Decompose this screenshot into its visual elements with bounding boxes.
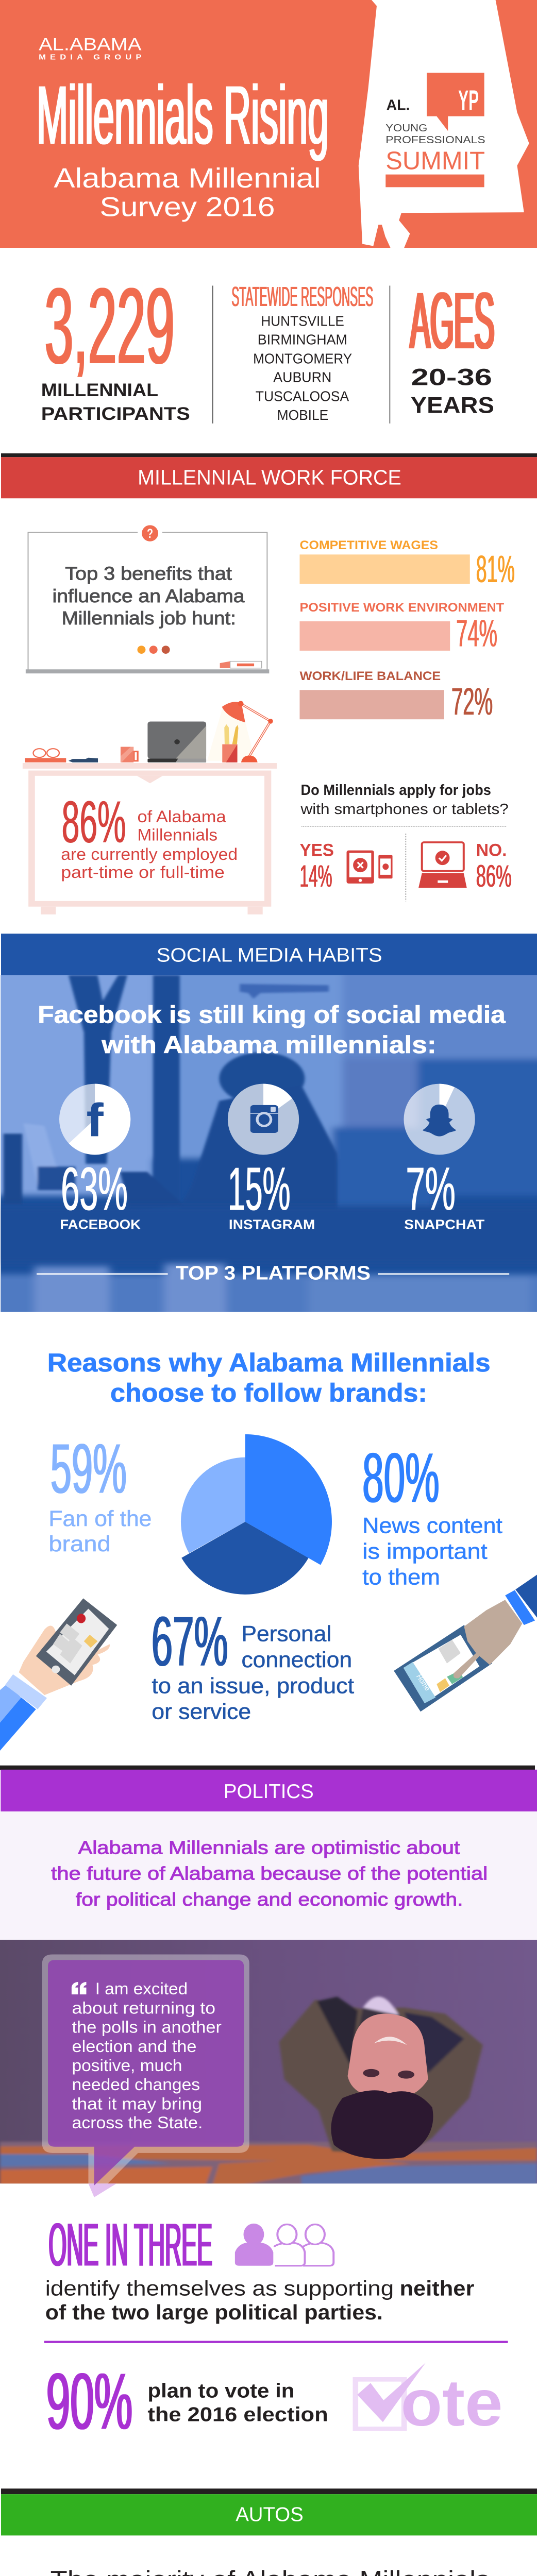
poll: applying with mobile devices: with smartphones or tablets? <box>300 801 509 817</box>
section header <box>1 1770 537 1811</box>
whiteboard <box>26 525 269 673</box>
stat: 3,229 participants: MILLENNIAL <box>41 380 158 400</box>
pie chart <box>181 1434 332 1595</box>
section header <box>1 457 537 498</box>
platform: Snapchat: SNAPCHAT <box>404 1217 484 1232</box>
stat: 59 percent: Fan of the <box>48 1506 152 1531</box>
platform: Instagram <box>228 1084 315 1232</box>
platform: Snapchat: 7% <box>406 1155 456 1223</box>
illustration: left hand holding phone <box>0 1598 117 1751</box>
panel: politics <box>0 1770 537 2197</box>
icon: Facebook pie: f <box>86 1095 104 1146</box>
stat: one in three: neither <box>400 2276 474 2300</box>
icon: laptop <box>147 721 206 762</box>
stat: 86 percent employed: Millennials <box>137 826 217 844</box>
icon: quotation mark <box>72 1982 86 1994</box>
stat: 80 percent <box>362 1438 502 1589</box>
intro statement: for political change and economic growth. <box>76 1889 463 1910</box>
stat: 90 percent: 90% <box>46 2357 132 2446</box>
statewide responses list: MONTGOMERY <box>253 351 352 367</box>
intro statement: Alabama Millennials are optimistic about <box>78 1837 460 1858</box>
heading: with Alabama millennials: <box>101 1031 437 1058</box>
stat: 80 percent: to them <box>362 1565 440 1589</box>
panel: millennial work force <box>1 453 537 914</box>
quote text: I am excited <box>95 1979 188 1998</box>
subtitle <box>54 163 321 223</box>
callout: quote bubble <box>42 1955 249 2197</box>
poll: applying with mobile devices: 14% <box>299 859 332 893</box>
logo: Young Professionals Summit: AL. <box>387 97 410 113</box>
stat: 86 percent employed: 86% <box>62 789 126 855</box>
panel: reasons to follow brands <box>0 1348 537 1770</box>
stat: 59 percent: brand <box>48 1531 111 1556</box>
desk illustration <box>23 701 277 914</box>
poll: applying with mobile devices: Do Millennials apply for jobs <box>300 782 491 798</box>
stat: one in three: of the two large political parties. <box>45 2300 383 2324</box>
stat: 80 percent: News content <box>362 1513 502 1538</box>
stat: 90 percent: plan to vote in <box>147 2380 295 2402</box>
icon: Snapchat pie <box>404 1084 475 1155</box>
statewide responses list: TUSCALOOSA <box>256 388 349 404</box>
panel: header and overview: 3,229 <box>44 266 175 386</box>
heading <box>47 1348 491 1408</box>
photo: woman lying on painted ground <box>0 1940 537 2185</box>
photo background: person at desk in blue tint <box>0 970 537 1321</box>
platform: Instagram: 15% <box>228 1155 291 1223</box>
logo: Young Professionals Summit: PROFESSIONALS <box>385 133 485 145</box>
icon: mug <box>121 747 138 762</box>
stat: no <box>476 840 512 893</box>
stat: ages: 20-36 <box>411 365 492 390</box>
stat: 59 percent <box>48 1430 152 1556</box>
board text: influence an Alabama <box>53 586 245 607</box>
logo: Young Professionals Summit: YOUNG <box>385 122 427 133</box>
hero banner background <box>0 0 537 248</box>
icon: question mark <box>142 525 158 541</box>
icon: vote checkbox: ote <box>401 2366 503 2439</box>
stat: 86 percent employed: of Alabama <box>137 808 226 826</box>
section header: autos <box>1 2488 537 2535</box>
section header: POLITICS <box>224 1780 314 1803</box>
platform: Facebook <box>59 1084 141 1232</box>
bar chart: top 3 benefits: COMPETITIVE WAGES <box>299 539 438 552</box>
stat: 67 percent: to an issue, product <box>152 1673 354 1698</box>
icon: book and glasses <box>25 749 66 762</box>
platform: Facebook: 63% <box>61 1155 128 1223</box>
logo: Young Professionals Summit <box>385 73 485 187</box>
stat: yes <box>299 840 334 893</box>
quote text: about returning to <box>72 1999 215 2018</box>
bar chart: top 3 benefits: WORK/LIFE BALANCE <box>299 670 441 683</box>
section header: SOCIAL MEDIA HABITS <box>157 944 382 966</box>
caption: top 3 platforms: TOP 3 PLATFORMS <box>176 1262 371 1284</box>
quote text: election and the <box>72 2038 196 2056</box>
stat: ages: YEARS <box>411 393 494 418</box>
quote text: that it may bring <box>72 2095 202 2113</box>
board text: Millennials job hunt: <box>62 608 236 629</box>
statewide responses list: HUNTSVILLE <box>261 313 344 329</box>
stat: ages <box>410 276 495 418</box>
panel: social media habits <box>0 934 537 1321</box>
section header <box>1 934 537 975</box>
logo: Young Professionals Summit: YP <box>458 85 479 116</box>
stat: 80 percent: 80% <box>362 1438 440 1517</box>
stat: 67 percent <box>152 1602 354 1724</box>
section header: autos: AUTOS <box>236 2504 304 2526</box>
stat: 3,229 participants: PARTICIPANTS <box>41 404 190 424</box>
stat: 90 percent: the 2016 election <box>147 2403 328 2426</box>
heading <box>38 1002 506 1058</box>
stat: 3,229 participants <box>41 266 190 424</box>
statewide responses list: MOBILE <box>277 408 328 423</box>
panel: party and voting stats <box>1 2211 537 2576</box>
stat: 67 percent: or service <box>152 1699 251 1724</box>
bar chart: top 3 benefits: POSITIVE WORK ENVIRONMENT <box>299 601 504 615</box>
quote text: needed changes <box>72 2075 200 2094</box>
stat: one in three: identify themselves as supporting <box>45 2276 394 2300</box>
icon: question mark: ? <box>147 526 153 541</box>
stat: 86 percent employed: part-time or full-time <box>61 863 225 882</box>
illustration: right hand tapping phone: Home <box>415 1673 432 1692</box>
icon: Facebook pie <box>59 1084 130 1155</box>
board text <box>53 563 245 629</box>
board text: Top 3 benefits that <box>65 563 232 584</box>
stat: one in three <box>45 2211 474 2324</box>
statewide responses list: AUBURN <box>273 370 331 385</box>
stat: 67 percent: Personal <box>242 1621 331 1646</box>
stat: 67 percent: 67% <box>152 1602 228 1681</box>
stat: no: NO. <box>476 840 507 860</box>
platform: Instagram: INSTAGRAM <box>229 1217 315 1232</box>
icon: three people <box>235 2224 333 2266</box>
logo: Young Professionals Summit: SUMMIT <box>385 147 485 175</box>
heading: choose to follow brands: <box>110 1378 427 1408</box>
icon: tablet and phone <box>347 851 393 884</box>
icon: vote checkbox <box>356 2363 503 2439</box>
section header: MILLENNIAL WORK FORCE <box>138 466 401 489</box>
stat: 59 percent: 59% <box>51 1430 127 1508</box>
panel: header and overview <box>0 0 537 424</box>
icon: Instagram pie <box>228 1084 299 1155</box>
intro statement: the future of Alabama because of the potential <box>51 1863 488 1884</box>
stat: 90 percent <box>46 2357 328 2446</box>
illustration: right hand tapping phone <box>394 1574 537 1711</box>
logo: Alabama Media Group: AL.ABAMA <box>39 34 142 54</box>
stat: 86 percent employed: are currently employed <box>61 845 238 863</box>
quote text <box>72 1979 222 2132</box>
quote text: positive, much <box>72 2057 182 2075</box>
stat: yes: YES <box>299 840 334 860</box>
icon: pencil cup <box>222 724 239 762</box>
subtitle: Alabama Millennial <box>54 163 321 194</box>
stat: 86 percent employed <box>61 789 238 882</box>
bar chart: top 3 benefits: 72% <box>451 681 493 723</box>
statewide responses list: BIRMINGHAM <box>258 332 347 348</box>
intro statement <box>0 1811 537 1940</box>
platform: Facebook: FACEBOOK <box>60 1217 141 1232</box>
subtitle: Survey 2016 <box>99 192 275 223</box>
icon: marker <box>220 662 262 668</box>
quote text: the polls in another <box>72 2018 222 2037</box>
icon: pen <box>69 758 98 762</box>
heading: Reasons why Alabama Millennials <box>47 1348 491 1377</box>
logo: Alabama Media Group: MEDIA GROUP <box>39 53 141 61</box>
stat: 80 percent: is important <box>362 1539 488 1564</box>
icon: desk lamp <box>222 701 273 762</box>
stat: 67 percent: connection <box>242 1647 352 1672</box>
statewide responses list <box>231 282 373 423</box>
icon: laptop with check <box>418 842 467 888</box>
Alabama state shape <box>359 0 529 248</box>
poll: applying with mobile devices <box>299 782 512 901</box>
quote text: across the State. <box>72 2113 203 2132</box>
bar chart: top 3 benefits <box>299 539 515 723</box>
platform: Snapchat <box>404 1084 484 1232</box>
